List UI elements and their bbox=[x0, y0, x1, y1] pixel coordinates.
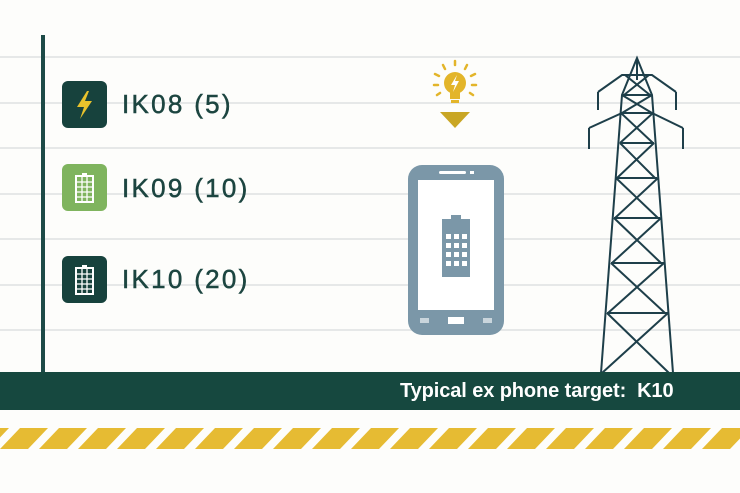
footer text: Typical ex phone target: K10 bbox=[400, 380, 673, 402]
icon: lightning bbox=[62, 81, 107, 128]
icon: transmission tower bbox=[588, 56, 684, 372]
label IK10: IK10 (20) bbox=[122, 264, 250, 294]
label IK09: IK09 (10) bbox=[122, 173, 250, 203]
item: IK08 bbox=[62, 81, 233, 128]
hazard stripe band bbox=[0, 428, 740, 449]
icon: smartphone with battery bbox=[408, 165, 504, 335]
icon: light bulb with arrow bbox=[432, 60, 478, 128]
item: IK09 bbox=[62, 164, 250, 211]
item: IK10 bbox=[62, 256, 250, 303]
icon: battery dark bbox=[62, 256, 107, 303]
vertical axis line bbox=[41, 35, 45, 373]
label IK08: IK08 (5) bbox=[122, 89, 233, 119]
footer band bbox=[0, 372, 740, 410]
icon: battery green bbox=[62, 164, 107, 211]
